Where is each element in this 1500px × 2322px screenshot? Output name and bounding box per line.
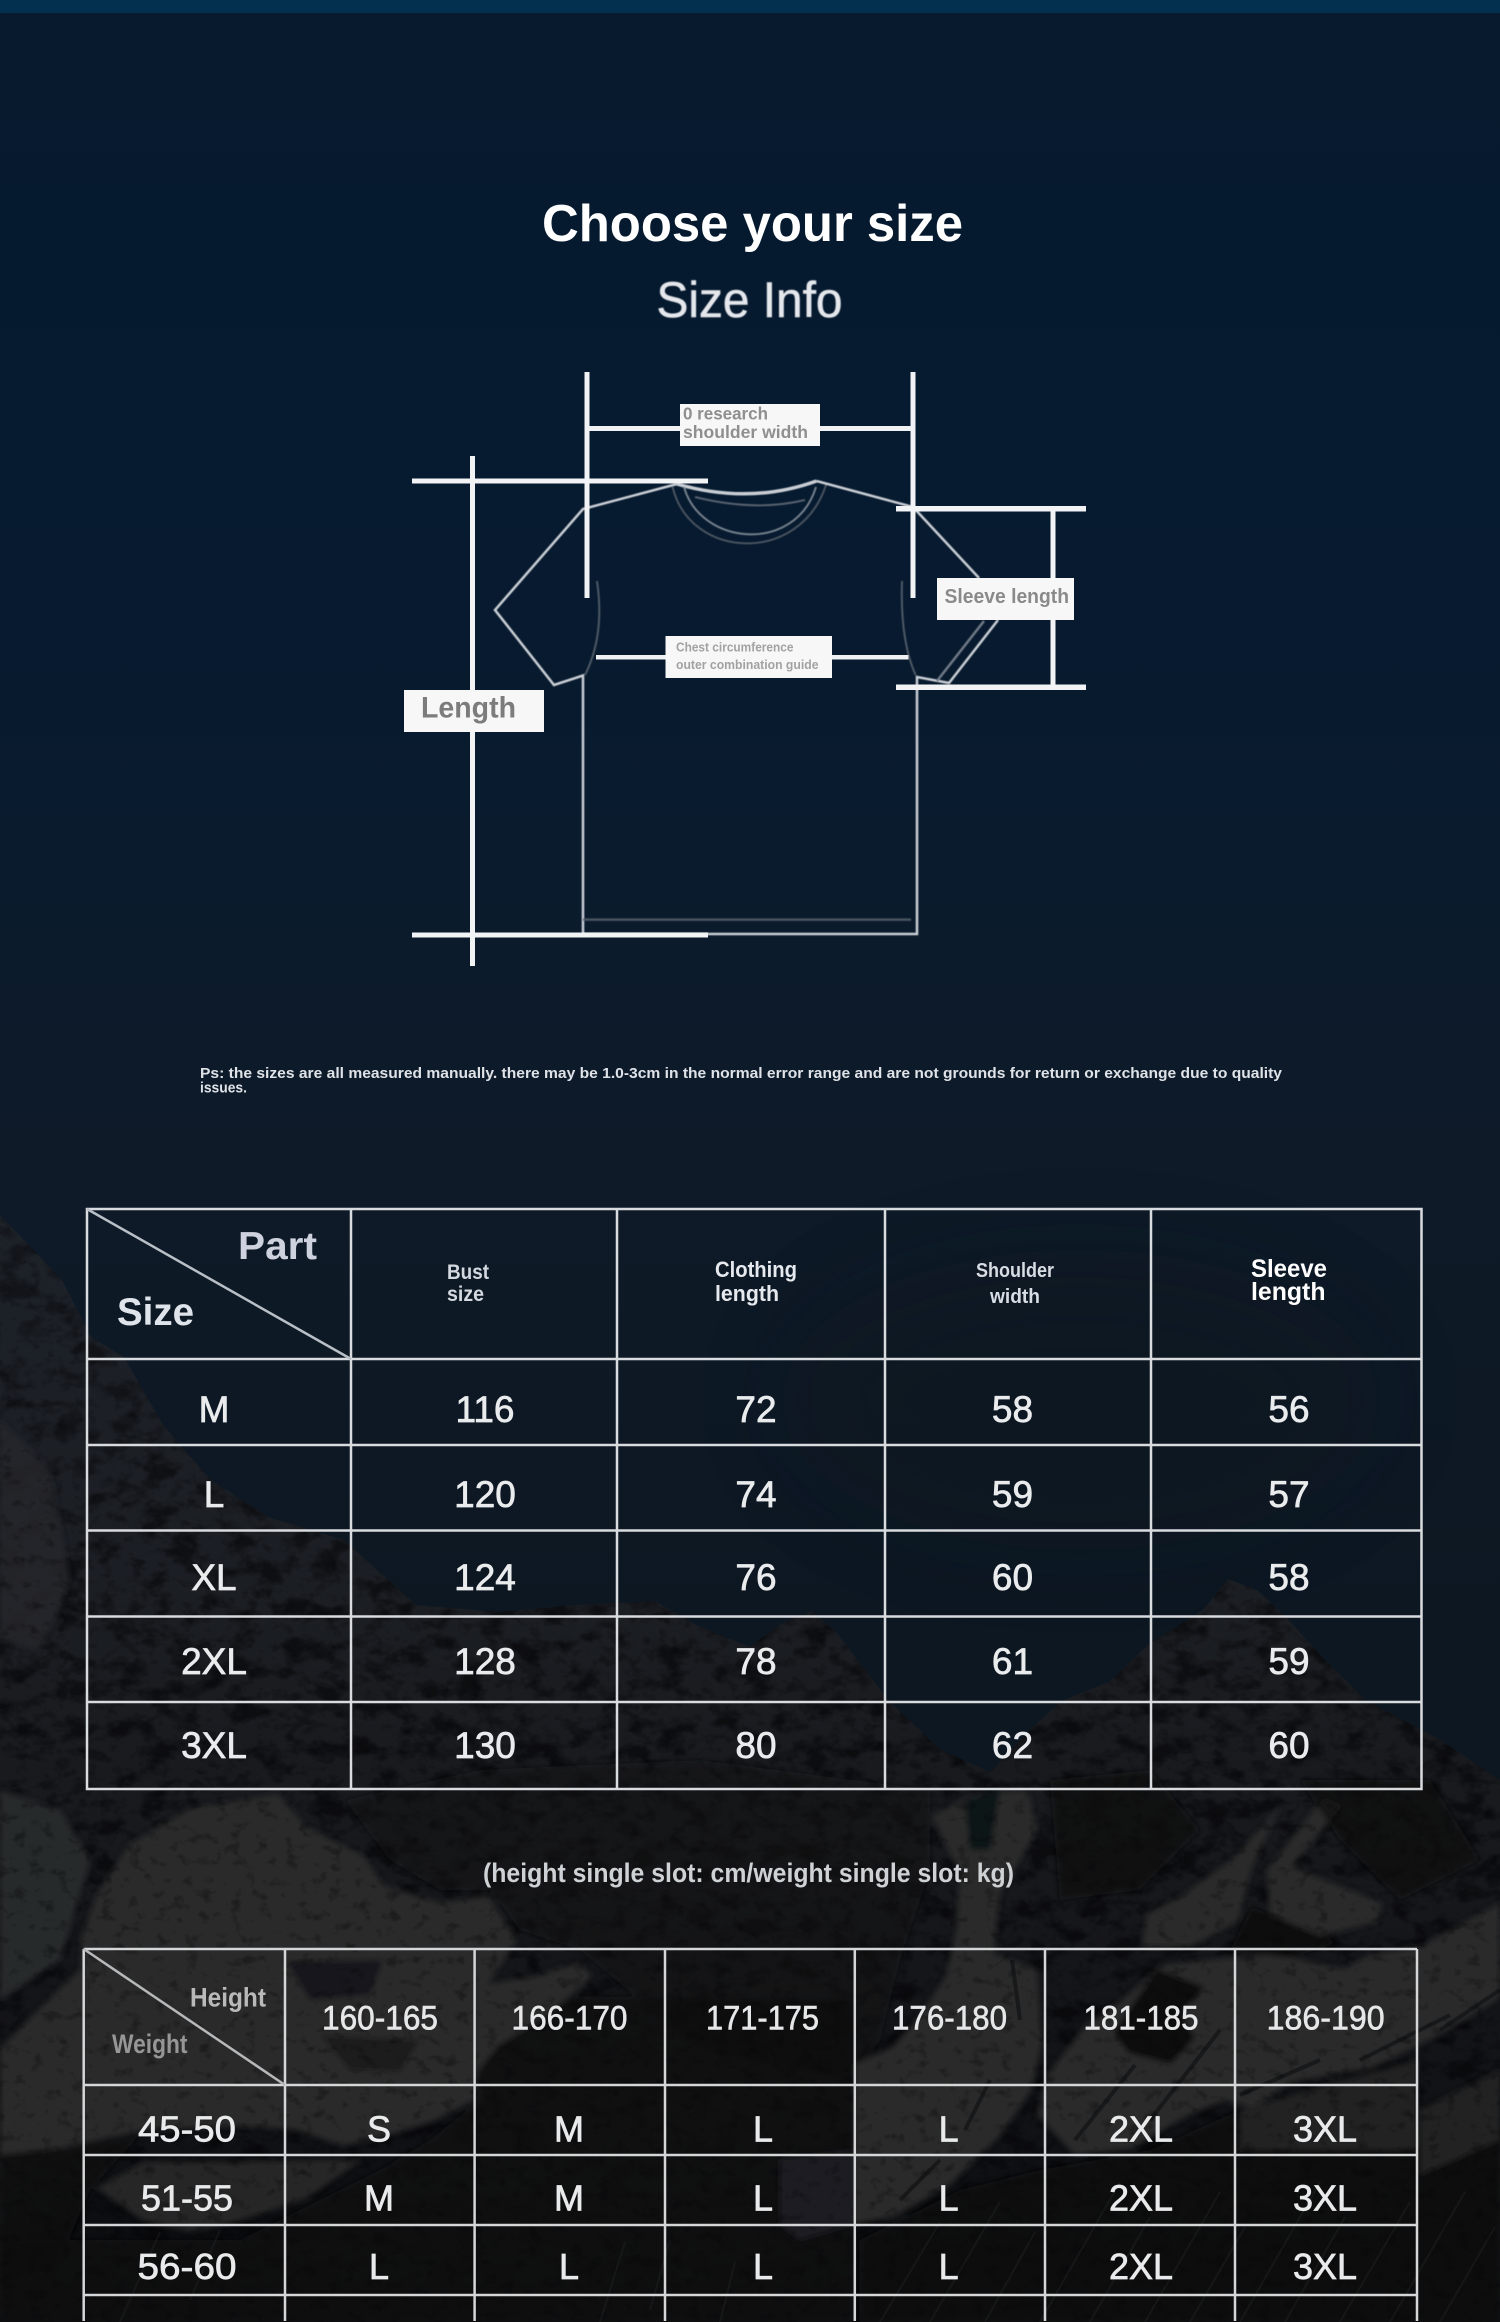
table rows: 58: [1268, 1557, 1310, 1598]
table header row: Clothing: [715, 1257, 797, 1282]
table rows: 2XL: [181, 1641, 247, 1682]
table rows: 78: [735, 1641, 777, 1682]
table rows: L: [204, 1474, 224, 1515]
table header row: 181-185: [1084, 2000, 1198, 2038]
table header row: [117, 1225, 1327, 1334]
table rows: 2XL: [1109, 2108, 1173, 2150]
note: measurement tolerance: Ps: the sizes are all measured manually. there may be 1.0-3cm in the normal error range and are not grounds for return or exchange due to quality: [200, 1065, 1283, 1082]
table header row: Shoulder: [976, 1260, 1054, 1282]
table rows: 72: [735, 1389, 777, 1430]
table rows: M: [554, 2178, 584, 2218]
table grid: [84, 1949, 1417, 2321]
table rows: 56-60: [138, 2246, 236, 2287]
table rows: 3XL: [181, 1725, 247, 1766]
table rows: XL: [191, 1557, 237, 1598]
table rows: 2XL: [1109, 2178, 1173, 2218]
table rows: L: [753, 2108, 773, 2150]
table header row: width: [989, 1286, 1040, 1308]
table header row: 176-180: [892, 2000, 1007, 2038]
units note: (height single slot: cm/weight single slot: kg): [483, 1858, 1014, 1888]
table rows: M: [199, 1389, 229, 1430]
table rows: M: [364, 2178, 394, 2218]
table header row: 171-175: [706, 2000, 819, 2038]
table rows: 3XL: [1293, 2246, 1357, 2287]
note: measurement tolerance: [200, 1065, 1283, 1096]
table: recommended size by height and weight: [84, 1949, 1417, 2321]
table rows: [138, 2108, 1357, 2287]
table rows: [181, 1389, 1310, 1766]
table rows: 80: [735, 1725, 777, 1766]
table rows: 51-55: [141, 2178, 233, 2218]
table rows: M: [554, 2108, 584, 2150]
table header row: Height: [190, 1982, 266, 2012]
table rows: 76: [735, 1557, 777, 1598]
title: Choose your size: [542, 195, 963, 253]
table header row: Part: [238, 1225, 317, 1268]
table header row: Weight: [112, 2029, 188, 2059]
length guide: [404, 456, 708, 966]
shoulder width guide: [584, 372, 916, 598]
table rows: 3XL: [1293, 2108, 1357, 2150]
sleeve length guide: [896, 506, 1086, 690]
shoulder width guide: shoulder width: [683, 422, 808, 442]
table rows: L: [559, 2246, 579, 2287]
table header row: length: [715, 1281, 779, 1306]
table rows: 120: [454, 1474, 516, 1515]
table rows: L: [939, 2178, 959, 2218]
table rows: 61: [992, 1641, 1033, 1682]
table rows: 116: [456, 1389, 514, 1430]
table rows: 3XL: [1293, 2178, 1357, 2218]
table rows: 60: [992, 1557, 1033, 1598]
table rows: 59: [992, 1474, 1033, 1515]
t-shirt measurement diagram: [404, 372, 1086, 966]
sleeve length guide: Sleeve length: [944, 586, 1069, 608]
table header row: 160-165: [322, 2000, 438, 2038]
table rows: 45-50: [138, 2108, 236, 2150]
table rows: 58: [992, 1389, 1033, 1430]
table header row: 166-170: [512, 2000, 628, 2038]
table rows: 124: [454, 1557, 516, 1598]
subtitle: Size Info: Size Info: [656, 272, 842, 328]
table rows: L: [369, 2246, 389, 2287]
table rows: 57: [1268, 1474, 1310, 1515]
chest circumference guide: outer combination guide: [676, 657, 818, 672]
table rows: L: [753, 2178, 773, 2218]
table header row: Sleeve: [1251, 1255, 1327, 1283]
table rows: 59: [1268, 1641, 1310, 1682]
table rows: 62: [992, 1725, 1033, 1766]
chest circumference guide: Chest circumference: [676, 640, 794, 654]
table header row: size: [447, 1283, 484, 1306]
table rows: 56: [1268, 1389, 1310, 1430]
table rows: 74: [735, 1474, 777, 1515]
table rows: S: [367, 2108, 391, 2150]
table header row: [112, 1982, 1385, 2059]
table grid: [87, 1209, 1422, 1789]
table rows: 128: [454, 1641, 516, 1682]
table rows: L: [939, 2246, 959, 2287]
table rows: L: [939, 2108, 959, 2150]
table: garment measurements by size: [87, 1209, 1422, 1789]
length guide: Length: [421, 692, 516, 724]
table header row: 186-190: [1267, 2000, 1385, 2038]
table header row: Size: [117, 1291, 194, 1334]
table rows: 130: [454, 1725, 516, 1766]
table rows: 60: [1268, 1725, 1310, 1766]
shoulder width guide: 0 research: [683, 404, 768, 424]
table header row: length: [1251, 1278, 1326, 1306]
chest circumference guide: [596, 636, 908, 678]
note: measurement tolerance: issues.: [200, 1080, 247, 1096]
table rows: 2XL: [1109, 2246, 1173, 2287]
t-shirt outline: [495, 481, 998, 934]
table rows: L: [753, 2246, 773, 2287]
table header row: Bust: [447, 1261, 489, 1284]
